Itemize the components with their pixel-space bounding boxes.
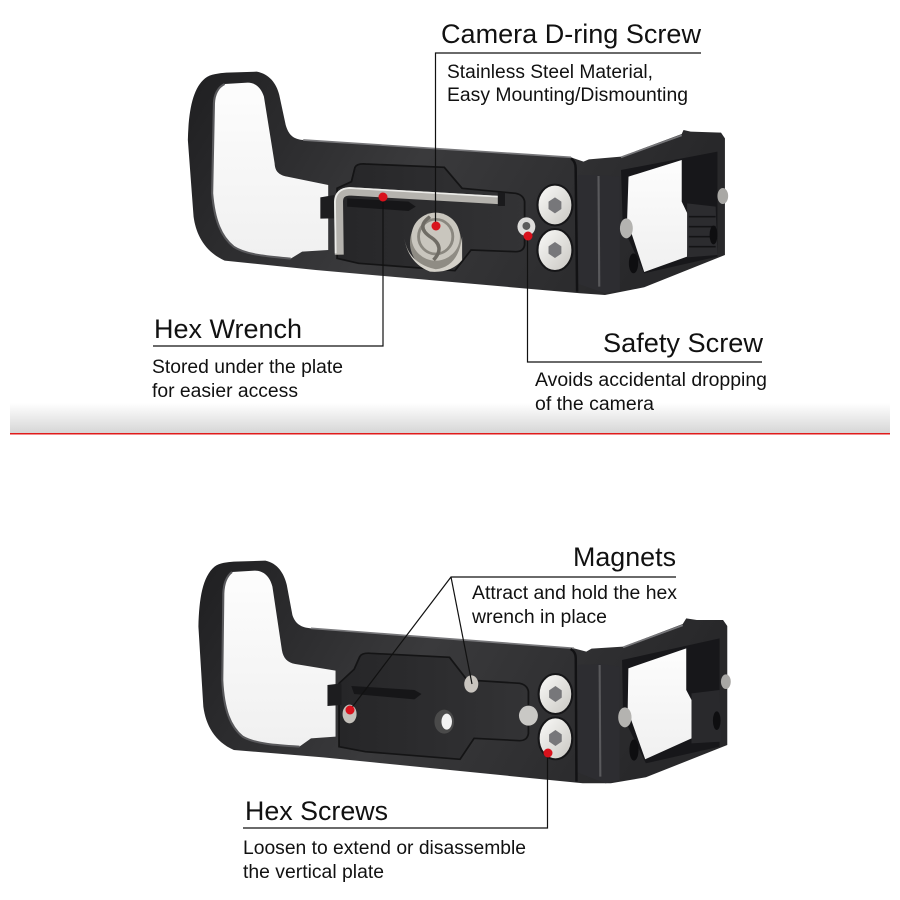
tripod hole [434,710,454,734]
callout: Hex Wrench: Hex Wrench [154,314,302,344]
callout: Camera D-ring Screw [432,19,701,230]
callout: Safety Screw: of the camera [535,394,654,415]
callout: Hex Wrench: Stored under the plate [152,357,343,378]
panel: bottom L-plate photo [198,561,731,783]
callout: Hex Screws: Loosen to extend or disassemble [243,838,526,859]
callout: Hex Screws [243,748,552,883]
left tab [320,195,334,219]
hinge block [578,664,620,783]
plate body [198,561,727,783]
callout: Hex Wrench: for easier access [152,381,298,402]
plate edge highlight [311,625,683,648]
D-ring screw [404,213,462,272]
frame inner rim [222,572,299,747]
recessed channel [339,653,528,759]
safety screw [519,706,538,726]
left window [222,571,336,747]
left tab [327,683,342,706]
callout: Magnets: Attract and hold the hex [472,583,678,604]
plate right edge [571,158,577,292]
hinge block [578,175,620,293]
callout: Safety Screw [524,232,767,415]
recessed channel [337,164,525,271]
callout: Hex Screws: the vertical plate [243,862,384,883]
large hex screws [539,674,572,714]
right ridged tab [692,690,721,743]
callout: Hex Wrench [152,192,388,402]
callout: Camera D-ring Screw: Stainless Steel Material, [447,62,653,83]
frame inner rim [212,84,291,259]
right plate holes and screws [629,253,638,273]
left window [212,83,328,259]
callout: Hex Screws: Hex Screws [245,796,388,826]
plate edge highlight [303,135,682,157]
callout: Safety Screw: Avoids accidental dropping [535,370,767,391]
divider band with red rule [10,403,890,434]
large hex screws [537,185,572,225]
magnets [343,705,357,723]
callout: Magnets: Magnets [573,542,676,572]
wrench holder [347,198,416,211]
callout: Camera D-ring Screw: Camera D-ring Screw [441,19,701,49]
callout: Magnets: wrench in place [471,607,607,628]
callout: Magnets [346,542,678,714]
right plate holes and screws [629,739,639,761]
wrench slot [351,686,421,699]
plate body [188,72,725,295]
callout: Safety Screw: Safety Screw [603,328,764,358]
plate right edge [571,649,576,782]
panel: top L-plate photo [188,72,728,295]
right window [621,152,717,273]
right ridged tab [687,203,717,257]
right window [622,638,720,763]
hex wrench [339,191,499,255]
callout: Camera D-ring Screw: Easy Mounting/Dismounting [447,85,688,106]
safety screw [517,217,535,236]
